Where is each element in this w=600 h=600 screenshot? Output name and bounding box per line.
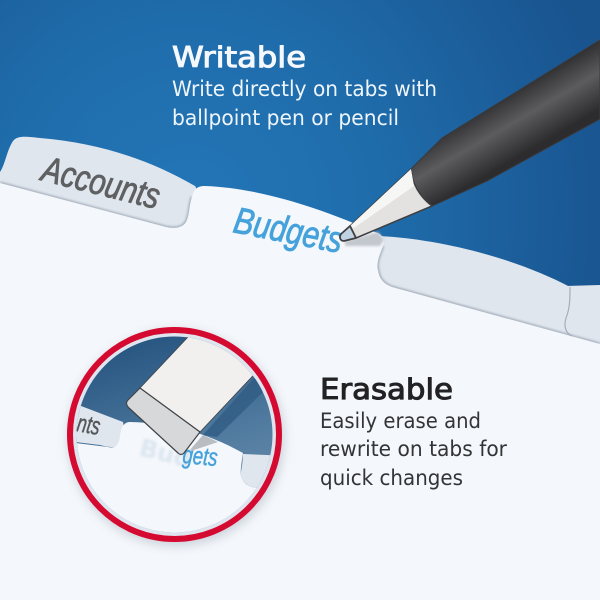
red ring: [70, 330, 279, 539]
tabs: right side: [376, 236, 600, 350]
magnified word: gets: gets: [181, 441, 219, 472]
text: writable description: Write directly on tabs with: [172, 77, 437, 101]
tab: blank 4: [566, 285, 600, 350]
blue header background: [0, 0, 600, 345]
magnifier circle: [64, 326, 288, 550]
white page with Budgets tab: [0, 183, 600, 600]
tab label: Accounts: Accounts: [36, 148, 164, 217]
pen cone highlight: [350, 169, 414, 228]
eraser white body: [140, 337, 253, 432]
erased ghost text: Bud: [137, 434, 194, 474]
heading: Writable: Writable: [172, 41, 306, 74]
magnified page: [76, 422, 256, 532]
text: erasable description: Easily erase and: [320, 409, 481, 433]
eraser: [126, 337, 253, 456]
circle shadow: [68, 330, 284, 546]
pen shadow: [345, 232, 384, 246]
circle base: [70, 330, 278, 538]
eraser grey end: [127, 388, 200, 454]
tab: Accounts: [0, 137, 196, 232]
tab 4 divider: [565, 287, 572, 336]
magnified tab right: [240, 454, 270, 488]
pen barrel: [411, 40, 600, 206]
magnified tab: Accounts: [76, 406, 124, 448]
text: erasable description: rewrite on tabs for: [320, 437, 507, 461]
text: writable description: ballpoint pen or pencil: [172, 106, 399, 130]
text: erasable description: quick changes: [320, 466, 463, 490]
magnified scene: [76, 336, 272, 532]
handwritten word: Budgets: Budgets: [230, 200, 346, 261]
tab edge shadows: [0, 183, 600, 344]
magnified right dark band: [203, 377, 263, 437]
heading: Erasable: Erasable: [320, 373, 453, 406]
pen tip: [340, 226, 356, 241]
tab: blank 3: [376, 236, 570, 340]
eraser shadow: [190, 435, 218, 451]
pen cone: [350, 169, 432, 238]
magnified word: nts: nts: [75, 409, 102, 441]
icon: ballpoint pen: [340, 40, 600, 241]
